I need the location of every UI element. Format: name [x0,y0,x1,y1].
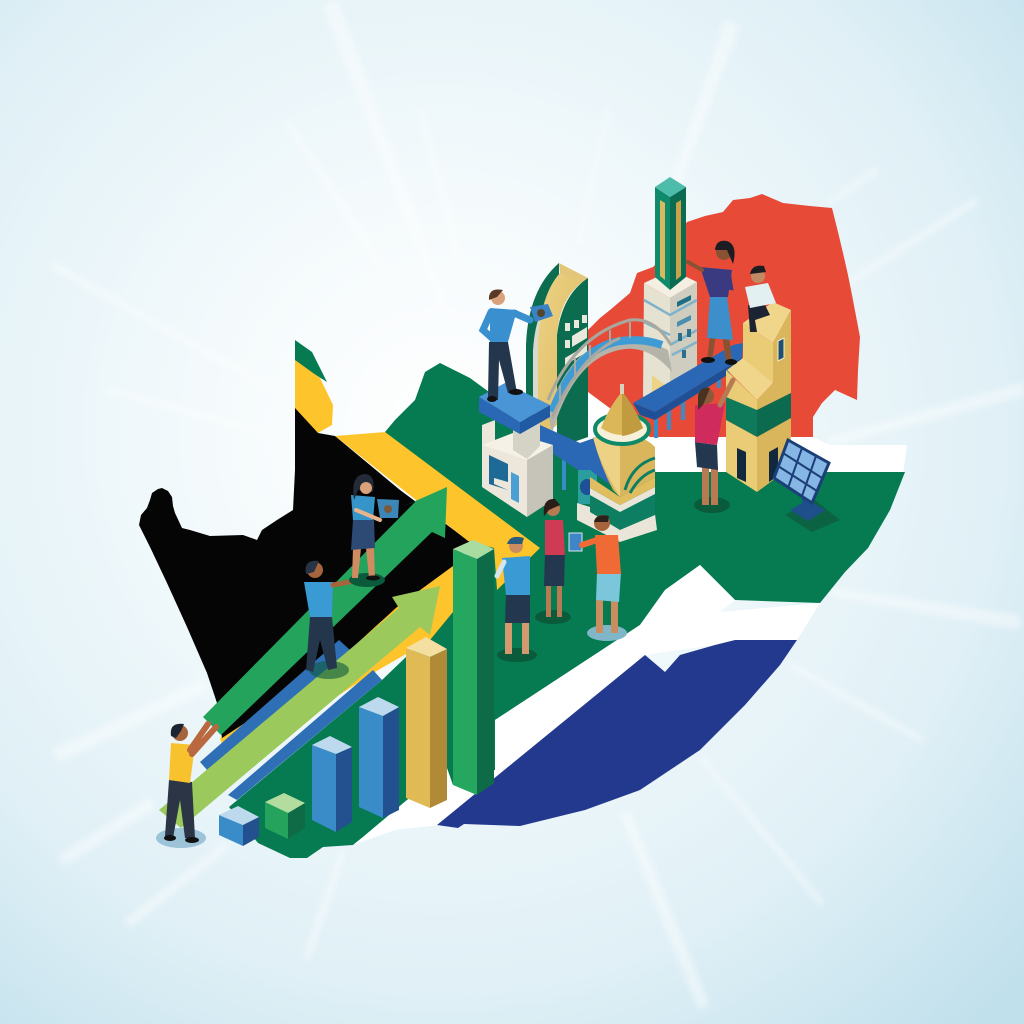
map region: white band upper [575,385,907,475]
map region: red north-east [588,194,860,440]
people [156,241,776,848]
map region: yellow diagonal band [335,432,540,590]
bar: blue short [312,736,352,832]
building: gold tower [726,302,791,492]
building: white block [482,418,553,517]
person: yellow shirt pushing arrow [156,724,216,848]
building: green arched tower [526,263,588,445]
arrow: dark green [203,487,447,735]
person: woman in pink [694,380,733,513]
map region: yellow lower band [220,563,453,744]
blue walkway left [540,425,613,504]
map of South Africa in flag colours [139,194,907,858]
person: boy with cap [497,537,537,662]
bridge arch [548,320,672,433]
map region: green sliver north [295,340,327,382]
person: man in orange [582,515,627,641]
map region: green centre [229,363,905,858]
chart: rising arrows [159,487,447,828]
icon: small tablet [569,533,582,551]
blue stripe upper [200,640,350,771]
map region: yellow north [295,360,333,433]
blue platform [479,383,550,434]
bar: green cube [265,793,305,839]
icon: solar panel [774,440,840,532]
person: woman with tablet [349,474,399,587]
person: man with blue shirt holding device [483,289,553,402]
bar: blue cube [219,806,259,846]
person: seated man [745,266,776,332]
map region: blue south [437,640,797,828]
city of isometric buildings [479,177,791,542]
person: blue shirt on arrow [304,561,354,679]
map region: black west [139,408,470,738]
building: domed temple [577,384,657,542]
blue walkway right [633,343,743,438]
blue stripe lower [228,670,382,800]
person: woman in dark skirt [535,499,571,624]
person: woman in blue skirt [688,241,737,365]
bar: gold [406,637,447,808]
bar: green tallest [453,540,494,795]
bar: blue tall [359,697,399,818]
map region: white band lower [353,565,820,845]
building: tower with spire [643,177,697,397]
spire [655,177,686,290]
arrow: light green [159,586,440,828]
chart: isometric bars [219,540,494,846]
